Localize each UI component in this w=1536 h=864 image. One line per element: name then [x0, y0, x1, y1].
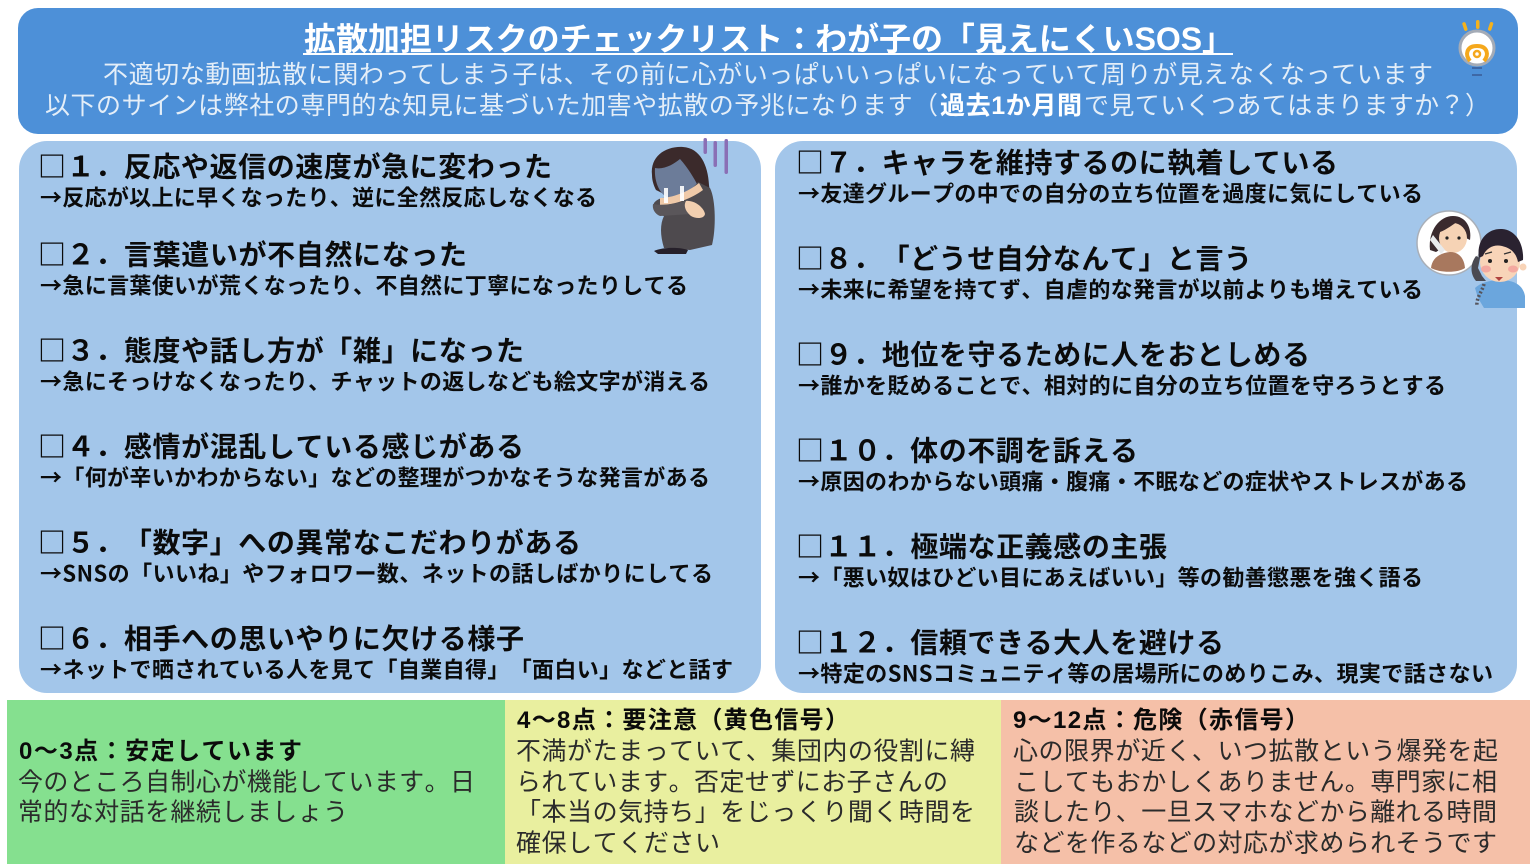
red body: こしてもおかしくありません。専門家に相 — [1014, 768, 1497, 796]
yellow body: 「本当の気持ち」をじっくり聞く時間を — [516, 798, 975, 826]
header intro line 2: 過去1か月間 — [940, 92, 1082, 120]
icon: light bulb — [1460, 20, 1494, 76]
green body: 常的な対話を継続しましょう — [18, 798, 348, 826]
panel: score 4-8 yellow — [505, 700, 1001, 864]
item 10: □１０．体の不調を訴える — [796, 430, 1138, 470]
green body — [18, 768, 475, 826]
item 4: →「何が辛いかわからない」などの整理がつかなそうな発言がある — [40, 460, 710, 492]
yellow body — [516, 738, 975, 858]
red body: 心の限界が近く、いつ拡散という爆発を起 — [1013, 738, 1498, 766]
item 11: □１１．極端な正義感の主張 — [796, 526, 1167, 566]
panel: score 9-12 red — [1001, 700, 1530, 864]
item 10 — [796, 430, 1468, 496]
header intro line 1: 不適切な動画拡散に関わってしまう子は、その前に心がいっぱいいっぱいになっていて周りが見えなくなっています — [103, 61, 1433, 89]
item 12: □１２．信頼できる大人を避ける — [796, 622, 1224, 662]
item 6: □６．相手への思いやりに欠ける様子 — [38, 618, 524, 658]
green heading: 0～3点：安定しています — [19, 738, 302, 765]
icon: crying girl — [652, 138, 728, 254]
panel: score 0-3 green — [7, 700, 505, 864]
item 11: →「悪い奴はひどい目にあえばいい」等の勧善懲悪を強く語る — [798, 560, 1423, 592]
item 5: □５．「数字」への異常なこだわりがある — [38, 522, 581, 562]
item 7: □７．キャラを維持するのに執着している — [796, 142, 1338, 182]
item 2 — [38, 234, 688, 300]
red body: 談したり、一旦スマホなどから離れる時間 — [1014, 798, 1497, 826]
yellow body: られています。否定せずにお子さんの — [516, 768, 948, 796]
item 6: →ネットで晒されている人を見て「自業自得」「面白い」などと話す — [40, 652, 733, 684]
item 7 — [796, 142, 1423, 208]
item 12: →特定のSNSコミュニティ等の居場所にのめりこみ、現実で話さない — [798, 656, 1493, 688]
header intro line 2: 以下のサインは弊社の専門的な知見に基づいた加害や拡散の予兆になります（ — [45, 92, 938, 120]
item 3: →急にそっけなくなったり、チャットの返しなども絵文字が消える — [40, 364, 710, 396]
yellow body: 確保してください — [516, 830, 720, 858]
item 1: →反応が以上に早くなったり、逆に全然反応しなくなる — [40, 180, 597, 212]
item 2: →急に言葉使いが荒くなったり、不自然に丁寧になったりしてる — [40, 268, 688, 300]
yellow heading: 4～8点：要注意（黄色信号） — [517, 707, 849, 734]
item 4 — [38, 426, 710, 492]
item 12 — [796, 622, 1493, 688]
panel: left checklist — [19, 138, 761, 693]
red heading: 9～12点：危険（赤信号） — [1013, 707, 1309, 734]
item 5 — [38, 522, 713, 588]
icon: phone call illustration — [1417, 211, 1526, 308]
item 4: □４．感情が混乱している感じがある — [38, 426, 524, 466]
item 10: →原因のわからない頭痛・腹痛・不眠などの症状やストレスがある — [798, 464, 1468, 496]
red body — [1013, 738, 1498, 858]
item 9: □９．地位を守るために人をおとしめる — [796, 334, 1310, 374]
header panel — [18, 8, 1518, 134]
item 11 — [796, 526, 1423, 592]
item 8: □８．「どうせ自分なんて」と言う — [796, 238, 1252, 278]
yellow body: 不満がたまっていて、集団内の役割に縛 — [516, 738, 975, 766]
item 9: →誰かを貶めることで、相対的に自分の立ち位置を守ろうとする — [798, 368, 1446, 400]
item 3: □３．態度や話し方が「雑」になった — [38, 330, 524, 370]
item 6 — [38, 618, 733, 684]
item 5: →SNSの「いいね」やフォロワー数、ネットの話しばかりにしてる — [40, 556, 713, 588]
item 1: □１．反応や返信の速度が急に変わった — [38, 146, 552, 186]
title: 拡散加担リスクのチェックリスト：わが子の「見えにくいSOS」 — [304, 21, 1234, 57]
item 7: →友達グループの中での自分の立ち位置を過度に気にしている — [798, 176, 1423, 208]
item 3 — [38, 330, 710, 396]
header intro line 2 — [45, 92, 1490, 120]
header intro line 2: で見ていくつあてはまりますか？） — [1084, 92, 1490, 120]
item 2: □２．言葉遣いが不自然になった — [38, 234, 467, 274]
item 8 — [796, 238, 1423, 304]
item 9 — [796, 334, 1446, 400]
red body: などを作るなどの対応が求められそうです — [1014, 830, 1497, 858]
item 8: →未来に希望を持てず、自虐的な発言が以前よりも増えている — [798, 272, 1423, 304]
item 1 — [38, 146, 597, 212]
panel: right checklist — [775, 141, 1526, 693]
green body: 今のところ自制心が機能しています。日 — [18, 768, 475, 796]
